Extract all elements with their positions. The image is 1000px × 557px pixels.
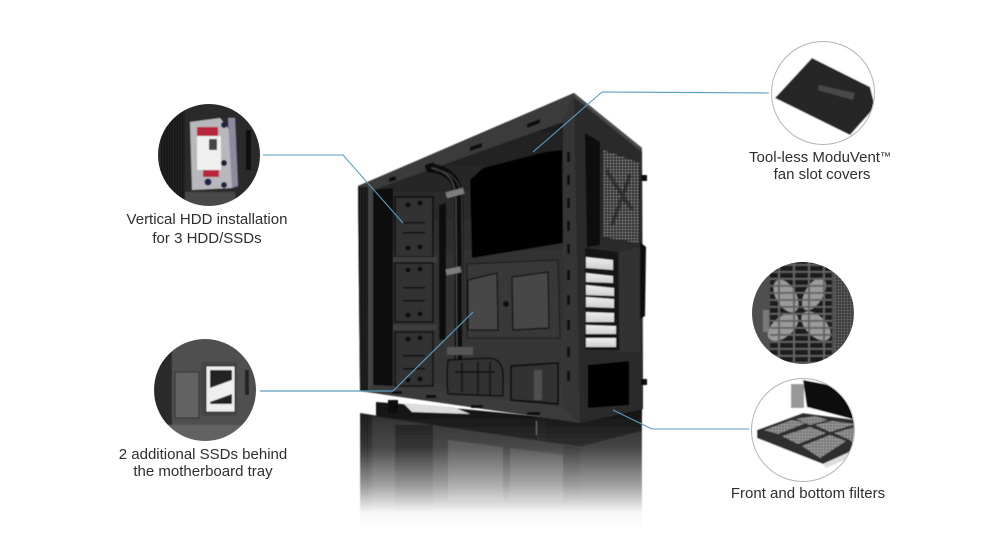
cable ties [446, 188, 473, 355]
HDD cage details [403, 200, 425, 382]
callout line: fan slot covers [533, 92, 769, 152]
bottom frame [360, 383, 580, 423]
front vent strip [358, 187, 368, 391]
front frame [368, 186, 373, 390]
bottom opening [588, 361, 629, 408]
circle: fan photo [750, 260, 857, 366]
cable routing slot [439, 203, 446, 340]
circle: fan slot cover photo [774, 58, 874, 136]
handle [640, 242, 646, 319]
bottom frame slots [392, 391, 540, 415]
CPU cutout [470, 150, 563, 258]
rear fan shape [606, 170, 632, 225]
text: filters: Front and bottom filters [731, 485, 885, 502]
motherboard tray [467, 260, 560, 338]
text: SSD [119, 446, 287, 480]
rear plate [619, 247, 640, 352]
thumb screw [503, 301, 509, 307]
rear fan grill [603, 150, 640, 243]
cable cutout bottom [447, 358, 503, 396]
text: HDD: for 3 HDD/SSDs [152, 230, 262, 247]
drive cage clips [393, 257, 437, 330]
case reflection [340, 400, 660, 530]
top frame [358, 93, 574, 190]
SSD plate right [512, 272, 549, 330]
text: fan slot covers: ™ [880, 151, 891, 163]
text: fan slot covers: fan slot covers [774, 166, 870, 183]
callout line: filters [613, 410, 749, 429]
psu shroud recess [511, 363, 558, 404]
circle: SSD photo [154, 339, 256, 441]
callout line: SSD [260, 312, 473, 391]
text: fan slot covers [749, 149, 891, 183]
rear frame edge [574, 93, 642, 152]
interior panel [373, 120, 563, 408]
text: fan slot covers: Tool-less ModuVent [749, 149, 880, 166]
expansion slot recess [585, 248, 619, 350]
circle: filter photo [756, 380, 854, 468]
SSD plate left [468, 273, 498, 330]
top frame slots [389, 119, 540, 182]
corner frame [563, 93, 580, 423]
text: HDD: Vertical HDD installation [127, 211, 287, 228]
text: SSD: 2 additional SSDs behind [119, 446, 287, 463]
circle: HDD photo [158, 104, 260, 206]
thumb screws [641, 175, 647, 385]
circle outline: filters [752, 378, 854, 482]
HDD cages [395, 197, 433, 386]
psu bay slot [585, 133, 600, 247]
side panel [574, 93, 643, 423]
case outer shell [358, 93, 643, 423]
cable cutout grommet lines [455, 362, 495, 395]
front interior mesh [373, 188, 393, 386]
cutouts along frame [567, 152, 570, 381]
psu cable [534, 370, 542, 400]
cable bundle [430, 168, 463, 375]
circle outline: fan slot cover [772, 42, 874, 144]
text: SSD: the motherboard tray [133, 463, 273, 480]
callout line: HDD [263, 155, 403, 223]
text: HDD [127, 211, 287, 247]
expansion slots [586, 257, 616, 347]
computer case [358, 93, 647, 423]
